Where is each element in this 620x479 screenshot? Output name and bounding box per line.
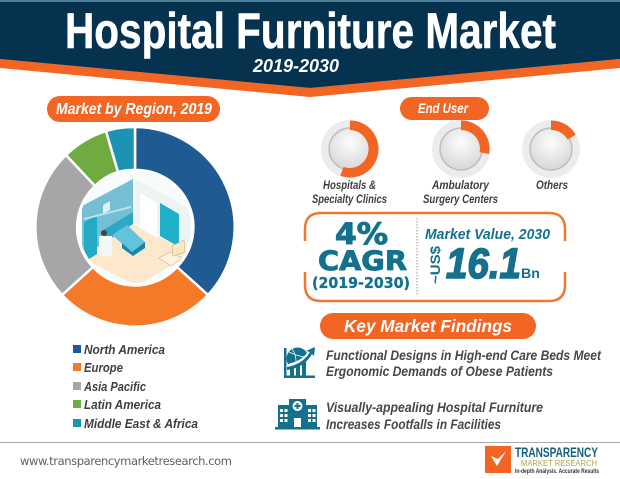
heading pill: key market findings [320,313,536,339]
logo: MARKET RESEARCH [521,459,597,468]
heading pill: end user [400,97,489,120]
label: Ambulatory [431,180,490,192]
illustration: hospital room [82,179,191,283]
segment: latin america [66,131,118,186]
floor [86,224,186,283]
market value stat: Market Value, 2030 [425,226,551,243]
chairs [159,252,182,266]
heading pill: market by region [47,96,220,122]
market value stat: Bn [521,265,540,281]
icon: hospital [275,399,320,430]
icon: growth chart [284,347,315,378]
legend: latin america: Latin America [84,397,161,412]
finding text 2: Visually-appealing Hospital Furniture [326,399,543,415]
segment: north america [135,127,235,295]
header banner [0,0,620,97]
subtitle: 2019-2030 [252,56,339,76]
website url: www.transparencymarketresearch.com [20,454,232,468]
left wall [82,179,133,257]
wall picture [103,201,110,214]
legend: middle east and africa: Middle East & Africa [84,416,198,431]
legend: asia pacific: Asia Pacific [83,379,147,394]
market value stat: ~US$ [427,246,443,284]
cagr stat [312,217,410,292]
label: Specialty Clinics [312,194,387,206]
ring: hospitals and specialty clinics [312,120,387,206]
legend: north america: North America [84,342,165,357]
left curtain [84,215,97,262]
heading pill: end user: End User [418,100,469,116]
heading pill: market by region: Market by Region, 2019 [56,101,212,118]
label: Hospitals & [323,180,376,192]
segment: asia pacific [35,155,95,295]
segment: middle east and africa [106,127,135,172]
window [140,193,157,238]
cabinet [99,236,112,256]
ring: others [522,120,580,192]
legend: europe: Europe [84,360,123,375]
right wall [135,179,191,253]
heading pill: key market findings: Key Market Findings [344,316,512,336]
segment: europe [62,267,208,327]
cagr stat: CAGR [318,246,407,277]
cagr stat: (2019-2030) [312,274,410,292]
bed [112,225,145,252]
right curtain [160,203,179,247]
legend [73,342,198,431]
ring: ambulatory surgery centers [423,120,498,206]
market value stat: 16.1 [446,240,521,288]
label: Surgery Centers [423,194,498,206]
market value stat [425,226,551,288]
wall rail [84,206,131,220]
logo [485,444,599,475]
cagr stat: 4% [335,217,388,251]
finding text 2: Increases Footfalls in Facilities [326,416,501,432]
stats box [305,213,565,301]
finding text 1: Ergonomic Demands of Obese Patients [326,363,553,379]
donut chart [35,127,235,327]
lower wall band [100,212,133,240]
label: Others [536,180,568,192]
